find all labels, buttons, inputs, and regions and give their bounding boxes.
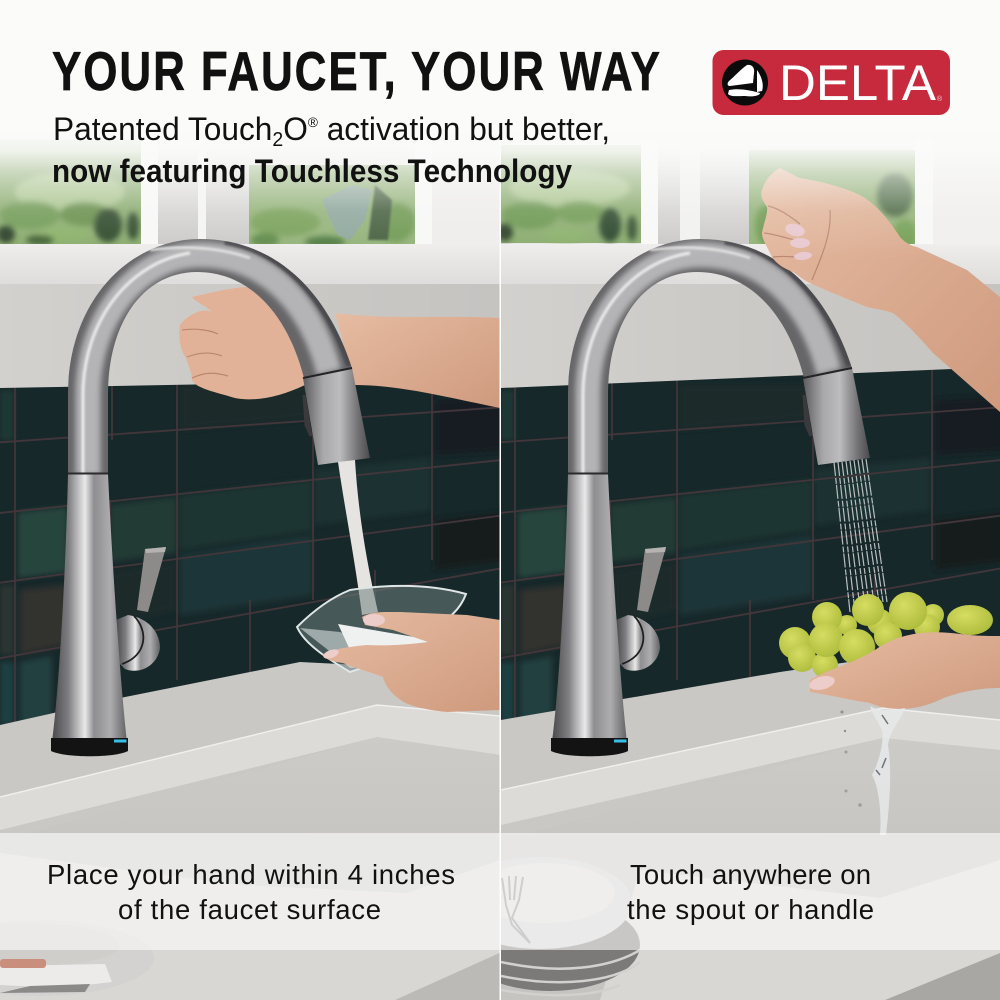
left counter foreground [0,950,500,1000]
grapes [779,592,993,678]
caption: left: of the faucet surface [118,894,381,925]
icon: Delta mark [722,60,768,106]
backsplash wall [501,284,1000,388]
caption: right [627,859,874,925]
right plates stack and fork [501,876,640,996]
backsplash wall [0,284,500,388]
subtitle: ® [308,114,319,130]
caption: left: Place your hand within 4 inches [47,859,455,890]
panel: right kitchen scene [501,145,1000,1000]
caption band [0,833,1000,950]
hand holding bowl [322,612,500,712]
subtitle: activation but better, [318,111,610,147]
right counter lighter front [600,950,1000,1000]
hand holding grapes [808,632,1000,709]
caption: left [47,859,455,925]
subtitle: 2 [272,129,283,151]
window with garden view [497,140,1000,285]
tile backsplash [0,384,500,725]
panel: left kitchen scene [0,142,500,893]
glass bowl [297,586,466,672]
subtitle: Patented Touch [53,111,278,147]
arm and hand touching spout [761,168,1000,412]
title: YOUR FAUCET, YOUR WAY [52,40,660,102]
logo registered mark: ® [937,95,943,103]
center divider [500,0,501,1000]
window with garden view [0,140,500,285]
top white fade [0,0,1000,260]
water spray [834,459,887,612]
faucet [51,230,370,756]
tile backsplash [501,369,1000,720]
subtitle [52,111,610,189]
left plate [0,950,117,993]
caption: right: the spout or handle [627,894,874,925]
faucet [551,230,870,756]
countertop [0,662,500,893]
falling water [840,706,905,835]
left foreground counter and dishes [0,950,500,1000]
right counter corner [885,953,1000,1000]
countertop [501,662,1000,835]
logo wordmark: DELTA [779,55,937,111]
left counter corner [395,953,500,1000]
subtitle bold line: now featuring Touchless Technology [52,153,572,189]
water stream [338,460,378,615]
subtitle: O [283,111,308,147]
right counter foreground [501,835,1000,1000]
arm and hand near spout [179,287,500,408]
logo: Delta [712,50,950,115]
caption: right: Touch anywhere on [630,859,871,890]
